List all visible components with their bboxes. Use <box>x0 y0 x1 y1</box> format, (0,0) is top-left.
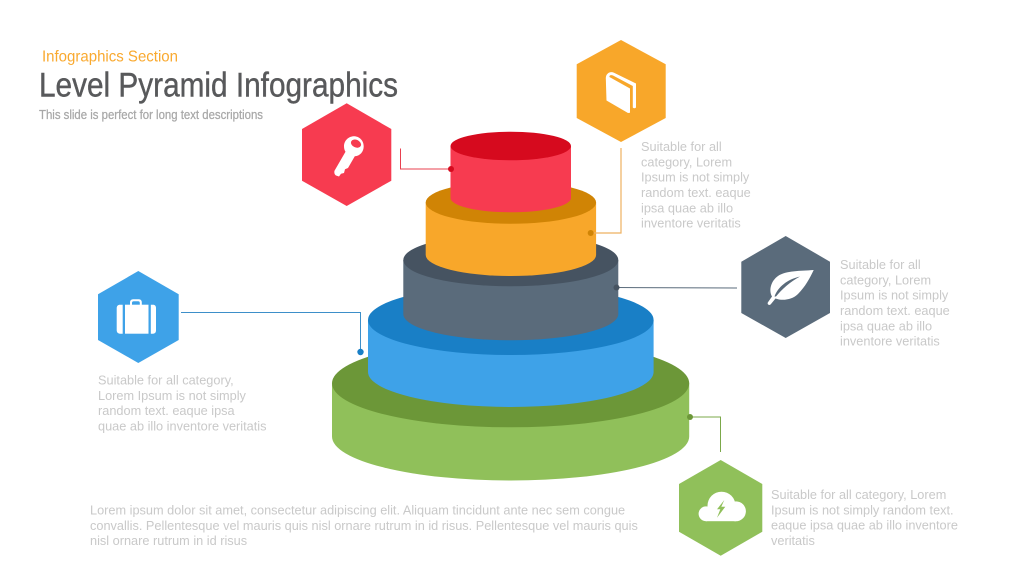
tier: red <box>450 132 571 212</box>
tier: green base <box>332 339 689 481</box>
text block: green: Ipsum is not simply random text. <box>771 502 954 517</box>
text block: green: Suitable for all category, Lorem <box>771 487 946 502</box>
text block: footer paragraph: Lorem ipsum dolor sit amet, consectetur adipiscing elit. Aliquam tincidunt ante nec sem congue <box>90 502 625 518</box>
icon: cloud <box>699 492 746 521</box>
text block: slate: random text. eaque <box>840 303 950 318</box>
pyramid <box>332 132 689 481</box>
text block: green: veritatis <box>771 533 815 548</box>
text block: orange: inventore veritatis <box>641 216 741 231</box>
text block: slate: ipsa quae ab illo <box>840 318 932 333</box>
text block: orange: random text. eaque <box>641 185 751 200</box>
text block: blue: Lorem Ipsum is not simply <box>98 388 247 403</box>
tier: blue <box>368 285 654 407</box>
tier: orange <box>426 181 596 276</box>
text block: slate: inventore veritatis <box>840 334 940 349</box>
icon: book <box>606 72 636 113</box>
hexagon: leaf <box>741 236 830 338</box>
text block: orange: Ipsum is not simply <box>641 170 750 185</box>
icon: key <box>334 136 364 176</box>
text block: slate: Suitable for all <box>840 257 921 272</box>
connector: green <box>687 414 720 452</box>
tier: slate <box>403 234 618 340</box>
text block: blue: random text. eaque ipsa <box>98 403 236 418</box>
hexagon: book <box>577 40 666 142</box>
text block: slate: category, Lorem <box>840 272 931 287</box>
subtitle: This slide is perfect for long text descriptions <box>39 108 263 122</box>
hexagon: cloud <box>679 460 762 556</box>
text block: footer paragraph: nisl ornare rutrum in id risus <box>90 533 247 548</box>
text block: orange: ipsa quae ab illo <box>641 200 733 215</box>
section label: Infographics Section <box>42 48 178 66</box>
icon: leaf <box>768 270 814 305</box>
text block: orange: Suitable for all <box>641 139 722 154</box>
hexagon: suitcase <box>98 271 179 363</box>
title: Level Pyramid Infographics <box>39 66 398 104</box>
text block: blue: Suitable for all category, <box>98 372 234 388</box>
text block: footer paragraph: convallis. Pellentesque vel mauris quis nisl ornare rutrum in id risus. Pellentesque vel mauris quis <box>90 518 638 533</box>
connector: orange <box>588 148 621 236</box>
connector: slate <box>614 284 737 290</box>
text block: orange: category, Lorem <box>641 154 732 169</box>
text block: blue: quae ab illo inventore veritatis <box>98 418 266 433</box>
text block: green: eaque ipsa quae ab illo inventore <box>771 518 958 533</box>
hexagon: key <box>302 103 391 206</box>
text block: slate: Ipsum is not simply <box>840 288 949 303</box>
connector: red <box>400 148 454 172</box>
connector: blue <box>181 312 364 355</box>
icon: suitcase <box>117 299 156 334</box>
